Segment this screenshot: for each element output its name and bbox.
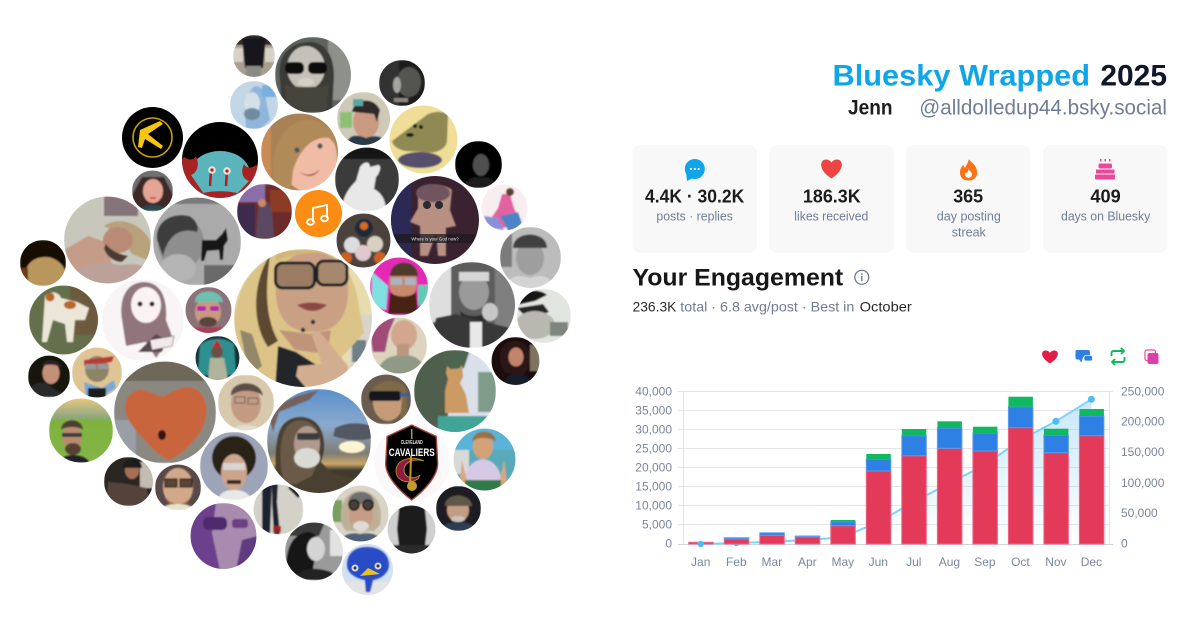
month labels: Apr (798, 555, 817, 569)
panel: posts and replies: 4.4K · 30.2K (645, 186, 744, 206)
month labels: Jan (691, 555, 710, 569)
avatar: man with pink sunglasses (185, 287, 232, 334)
icon: replies legend (1076, 350, 1092, 362)
avatar: cartoon man with pink background (370, 257, 430, 315)
avatar: woman with pink hair and tattoos (371, 317, 428, 375)
panel: days on Bluesky (1043, 145, 1168, 253)
left axis labels: 10,000 (635, 498, 672, 512)
right axis labels: 0 (1121, 536, 1128, 550)
cumulative area (701, 399, 1091, 544)
avatar: smiling blonde woman (261, 113, 339, 192)
left axis labels: 25,000 (635, 442, 672, 456)
grid lines (678, 391, 1113, 544)
chart legend icons (1042, 348, 1158, 365)
avatar: man in the dark (455, 141, 502, 188)
left axis labels (635, 384, 672, 550)
icon: heart (821, 160, 842, 178)
avatar: woman in mesh top (104, 457, 154, 506)
avatar: man in a green field at sunset (49, 398, 113, 463)
avatar: long-haired man, monochrome (285, 522, 344, 580)
Jan marker (698, 541, 704, 547)
left axis labels: 40,000 (635, 384, 672, 398)
user name and handle: Jenn (848, 96, 892, 119)
avatar: woman with dark hair (491, 337, 540, 386)
avatar: figure in black shirt (233, 35, 275, 78)
title: 2025 (1100, 60, 1167, 93)
left axis labels: 20,000 (635, 460, 672, 474)
panel: day posting streak: day posting (937, 210, 1001, 224)
icon: reposts legend (1112, 348, 1124, 365)
avatar: man with black dog, monochrome (153, 197, 244, 285)
avatar: man with afro and moustache (200, 432, 268, 500)
panel: likes received: likes received (794, 210, 868, 224)
avatar: sunglasses close up, monochrome (515, 289, 571, 343)
avatar: woman in colourful dress (481, 184, 528, 232)
panel: likes received (769, 145, 894, 253)
avatar: blue sketch portrait (230, 81, 278, 129)
heading: Your Engagement: Your Engagement (632, 264, 843, 291)
month labels: Jun (869, 555, 888, 569)
panel: days on Bluesky: days on Bluesky (1061, 210, 1151, 224)
avatar: brown and white dog in grass (29, 285, 100, 355)
avatar: bearded man with sunglasses, monochrome (275, 37, 352, 113)
panel: day posting streak: streak (952, 226, 987, 240)
avatar: crab illustration (180, 122, 260, 200)
avatar: blue penguin bird (342, 544, 393, 596)
icon: quotes legend (1145, 350, 1158, 364)
avatar: Cleveland Cavaliers shield logo: CLEVELAND (401, 440, 423, 446)
month labels: Oct (1011, 555, 1030, 569)
avatar: Cleveland Cavaliers shield logo: CAVALIERS (389, 447, 435, 459)
avatar: orange cat on a teal ledge (414, 350, 496, 434)
icon: flame (960, 159, 977, 180)
avatar: dark grey face (379, 60, 425, 106)
avatar: orange heart-shaped rock (114, 361, 216, 464)
right axis labels: 50,000 (1121, 506, 1158, 520)
panel: posts and replies: posts · replies (656, 210, 733, 224)
month labels: Aug (939, 555, 960, 569)
avatar: rock with a face (389, 105, 459, 175)
icon: orange music note bubble (295, 190, 342, 237)
avatar: furby photo with caption (391, 176, 479, 264)
left axis labels: 5,000 (642, 518, 672, 532)
left axis labels: 35,000 (635, 404, 672, 418)
avatar bubble cluster (20, 35, 571, 596)
month labels: Dec (1081, 555, 1102, 569)
avatar: hooded man at sunset (267, 389, 373, 500)
stacked bars (689, 397, 1104, 544)
engagement summary text: 236.3K (632, 299, 677, 315)
left axis labels: 0 (665, 536, 672, 550)
month labels: Mar (761, 555, 782, 569)
month labels: May (831, 555, 854, 569)
avatar: furby photo with caption: Where is your God now? (411, 236, 459, 242)
avatar: main portrait, blonde woman with glasses (234, 249, 374, 390)
avatar: man with wraparound shades (361, 374, 411, 424)
chart: monthly engagement stacked bars with cumulative line (635, 384, 1165, 569)
month labels: Feb (726, 555, 747, 569)
avatar: anime woman drawing (102, 279, 184, 361)
user name and handle: @alldolledup44.bsky.social (919, 96, 1167, 119)
avatar: older man with beanie and glasses (332, 485, 389, 542)
engagement summary text (632, 299, 912, 315)
panel: day posting streak: 365 (953, 186, 983, 206)
avatar: phrenology head (20, 240, 66, 286)
avatar: man with thick glasses and beard (155, 464, 201, 510)
right axis labels (1121, 384, 1165, 550)
avatar: woman with bright makeup (132, 170, 173, 211)
title: Bluesky Wrapped (832, 60, 1090, 93)
panel: day posting streak (906, 145, 1030, 253)
avatar: grey-haired man with glasses (218, 375, 274, 431)
left axis labels: 15,000 (635, 480, 672, 494)
icon: likes legend (1042, 350, 1058, 364)
avatar: legs in dark trousers (253, 484, 303, 534)
engagement summary text: October (860, 299, 912, 315)
panel: days on Bluesky: 409 (1090, 186, 1121, 206)
engagement summary text: total · 6.8 avg/post · Best in (680, 299, 854, 315)
avatar: white rabbit mask, monochrome (335, 147, 399, 211)
panel: posts and replies (632, 145, 757, 253)
avatar: man in knit hat in car (436, 486, 481, 531)
cumulative line (701, 399, 1091, 544)
left axis labels: 30,000 (635, 422, 672, 436)
avatar: monkey on teal mural (195, 336, 240, 381)
month labels (691, 555, 1102, 569)
panel: likes received: 186.3K (803, 186, 861, 206)
month labels: Jul (906, 555, 921, 569)
avatar: Cleveland Cavaliers shield logo (374, 424, 450, 500)
avatar: man sleeping with blonde hair (64, 196, 152, 285)
right axis labels: 250,000 (1121, 384, 1165, 398)
avatar: K logo badge (122, 107, 183, 168)
avatar: purple tinted man with shades (190, 503, 257, 570)
avatar: man with colored hair (337, 92, 391, 146)
avatar: violinist under red lights (237, 184, 292, 239)
avatar: man in Sonics jersey by the sea (453, 428, 516, 495)
avatar: man in cap, monochrome (500, 227, 561, 290)
right axis labels: 100,000 (1121, 476, 1165, 490)
line markers (733, 396, 1095, 546)
right axis labels: 200,000 (1121, 414, 1165, 428)
avatar: smiling man in black shirt (28, 355, 70, 397)
right axis labels: 150,000 (1121, 445, 1165, 459)
avatar: dark dress, monochrome (387, 505, 436, 555)
icon: birthday cake (1095, 159, 1115, 180)
month labels: Sep (974, 555, 996, 569)
avatar: plush toys (336, 213, 391, 268)
icon: info (855, 270, 869, 284)
month labels: Nov (1045, 555, 1067, 569)
avatar: man with hand on chin, monochrome (429, 262, 517, 348)
icon: chat bubble (685, 159, 705, 181)
avatar: cartoon man with red bandana (72, 347, 122, 398)
